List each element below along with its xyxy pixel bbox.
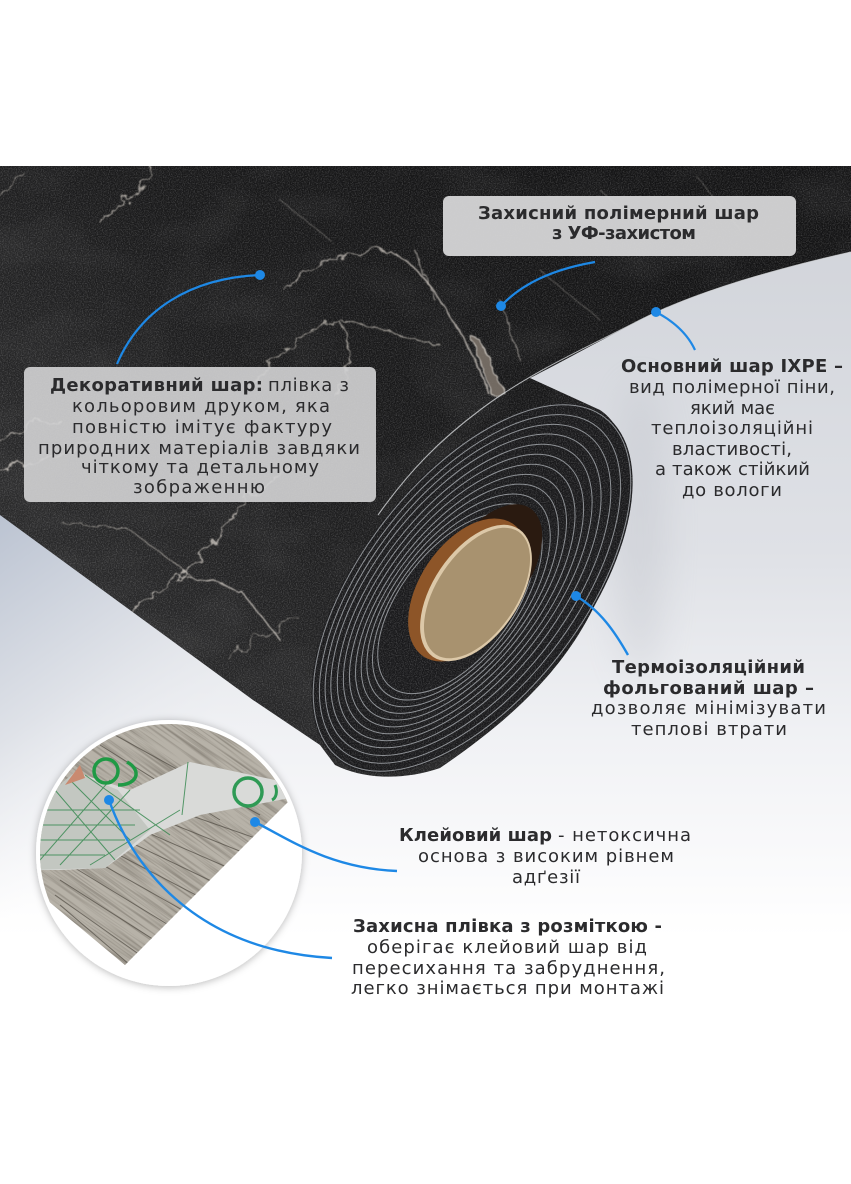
panel: polymer layer label: Захисний полімерний шар (478, 203, 759, 224)
text: protective film: оберігає клейовий шар від (367, 937, 647, 958)
callout line: IXPE layer (651, 307, 695, 350)
panel: decorative layer label: природних матеріалів завдяки (38, 438, 360, 459)
text: foil layer: теплові втрати (631, 719, 787, 740)
cardboard tube (383, 486, 563, 683)
text: IXPE layer: теплоізоляційні (651, 418, 813, 439)
text: adhesive layer: - нетоксична (558, 825, 691, 846)
zoom circle: adhesive layer detail (32, 716, 306, 992)
panel: decorative layer label (24, 367, 376, 502)
panel: decorative layer label: Декоративний шар: (50, 375, 263, 396)
text: adhesive layer: адґезії (512, 867, 581, 888)
text: adhesive layer: Клейовий шар (399, 825, 552, 846)
panel: decorative layer label: чіткому та детальному (81, 457, 319, 478)
text: IXPE layer: властивості, (672, 439, 792, 460)
text: adhesive layer: основа з високим рівнем (418, 846, 674, 867)
foil with net (30, 762, 290, 870)
text: protective film: пересихання та забруднення, (352, 958, 665, 979)
panel: polymer layer label (443, 196, 796, 256)
panel: polymer layer label: з УФ-захистом (552, 223, 696, 244)
callout line: polymer layer (496, 262, 595, 311)
text: adhesive layer (399, 825, 691, 888)
callout line: protective film (104, 795, 332, 958)
sheet edge (378, 252, 851, 515)
text: IXPE layer: вид полімерної піни, (629, 377, 835, 398)
text: foil layer: фольгований шар – (603, 678, 814, 699)
callout line: decorative layer (117, 270, 265, 364)
wood grain (55, 735, 275, 965)
green rings (94, 759, 118, 783)
marble veins (0, 166, 740, 660)
text: IXPE layer (621, 356, 843, 501)
text: foil layer: Термоізоляційний (612, 657, 805, 678)
text: IXPE layer: до вологи (682, 480, 782, 501)
text: foil layer: дозволяє мінімізувати (591, 698, 826, 719)
rolled film sheet (0, 166, 851, 826)
text: foil layer (591, 657, 826, 740)
callout line: adhesive layer (250, 817, 397, 871)
panel: decorative layer label: кольоровим друком, яка (72, 396, 330, 417)
text: protective film: легко знімається при монтажі (351, 978, 664, 999)
text: protective film (351, 916, 665, 999)
text: IXPE layer: а також стійкий (655, 459, 810, 480)
text: IXPE layer: який має (690, 398, 775, 419)
callout line: foil layer (571, 591, 628, 655)
panel: decorative layer label: плівка з (268, 375, 349, 396)
roll face (312, 404, 633, 773)
text: protective film: Захисна плівка з розміткою - (353, 916, 662, 937)
panel: decorative layer label: повністю імітує фактуру (72, 417, 332, 438)
text: IXPE layer: Основний шар IXPE – (621, 356, 843, 377)
panel: decorative layer label: зображенню (133, 477, 265, 498)
